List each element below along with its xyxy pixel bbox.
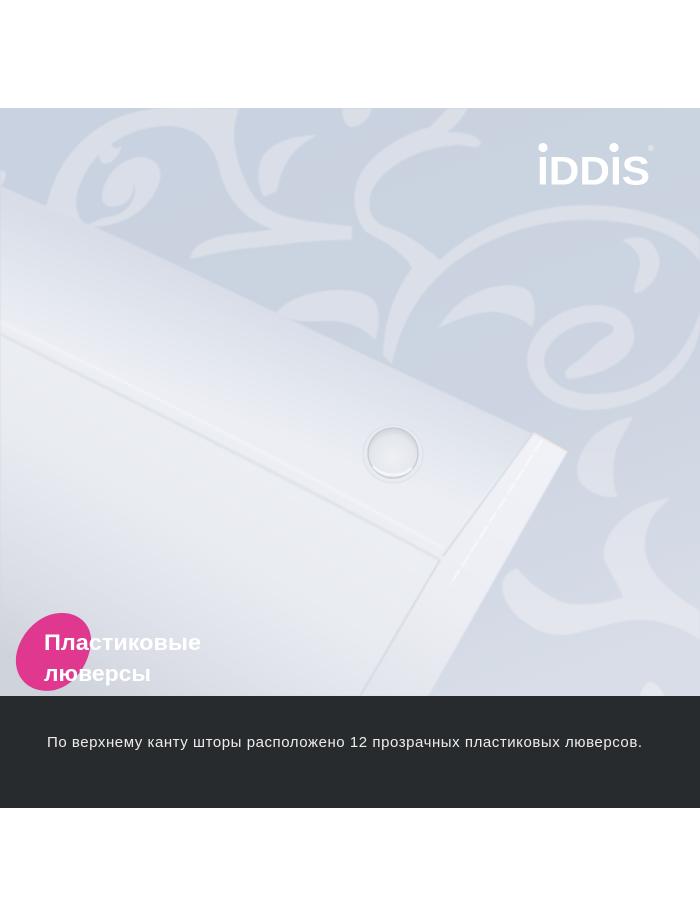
icon: transparent plastic grommet — [363, 425, 423, 483]
damask ornament pattern — [0, 106, 700, 696]
panel: fabric photo — [0, 106, 700, 696]
grommet lens — [368, 428, 418, 478]
fabric background — [0, 108, 700, 696]
logo: IDDIS — [537, 143, 654, 194]
side hem band — [532, 433, 558, 448]
infographic canvas — [0, 108, 700, 808]
caption text: По верхнему канту шторы расположено 12 прозрачных пластиковых люверсов. — [47, 734, 642, 751]
heading line 1: Пластиковые — [44, 630, 201, 655]
logo dot second i — [609, 143, 619, 152]
panel: dark caption bar — [0, 696, 700, 808]
curtain body — [0, 186, 567, 696]
heading: plastic grommets — [44, 630, 201, 686]
pink accent blob — [16, 613, 91, 691]
heading line 2: люверсы — [44, 661, 151, 686]
curtain sheet — [0, 322, 508, 696]
upper hem band — [0, 186, 530, 474]
logo dot first i — [538, 143, 548, 152]
grommet highlight — [373, 466, 412, 475]
seam lines — [0, 322, 567, 696]
logo wordmark: IDDIS — [537, 150, 650, 194]
caption background — [0, 696, 700, 808]
logo registered mark: ® — [648, 144, 654, 153]
grommet flange — [363, 425, 423, 483]
